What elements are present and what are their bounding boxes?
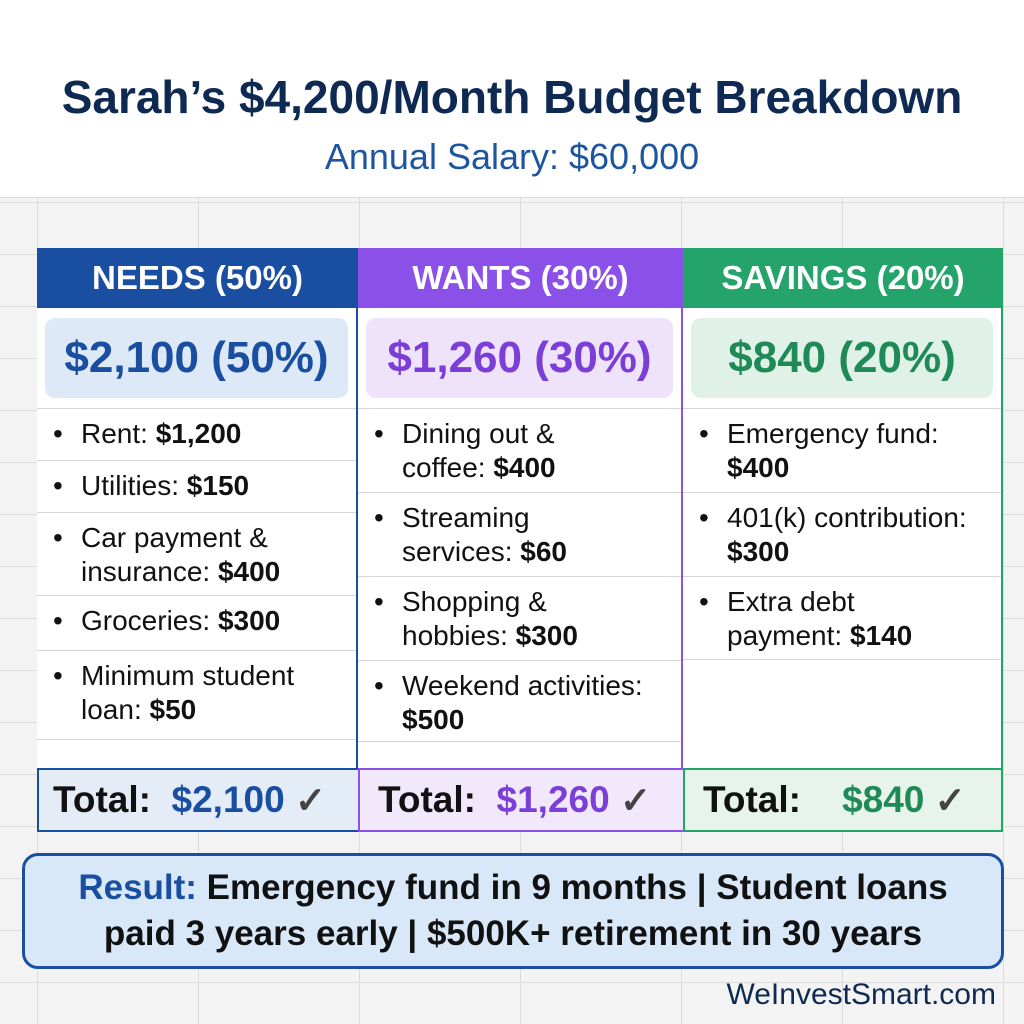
panel: savings [683,308,1003,768]
total: needs: ✓ [295,780,326,820]
header: wants: WANTS (30%) [412,259,629,296]
panel: needs: Minimum student loan: $50 [81,660,294,725]
result callout: Result: Emergency fund in 9 months | Student loans [78,868,948,907]
total: wants: $1,260 [497,779,610,820]
total: wants [358,768,683,832]
panel: needs: Rent: $1,200 [81,418,241,449]
panel: savings: 401(k) contribution: $300 [727,502,967,567]
panel: savings: Extra debt payment: $140 [727,586,912,651]
header: wants [358,248,683,308]
panel: wants: Streaming services: $60 [402,502,567,567]
panel: wants: Shopping & hobbies: $300 [402,586,578,651]
total: savings [683,768,1003,832]
header: needs [37,248,358,308]
amount: needs: $2,100 (50%) [64,333,329,382]
subtitle: Annual Salary: $60,000 [325,136,699,177]
result callout: paid 3 years early | $500K+ retirement in 30 years [104,914,922,953]
total: wants: ✓ [620,780,651,820]
amount: savings: $840 (20%) [728,333,956,382]
header: savings: SAVINGS (20%) [721,259,965,296]
panel: needs: Utilities: $150 [81,470,249,501]
panel: wants: Weekend activities: $500 [402,670,643,735]
amount: wants [366,318,673,398]
panel: wants [358,308,683,768]
panel: wants: Dining out & coffee: $400 [402,418,556,483]
total: needs: $2,100 [172,779,285,820]
amount: needs [45,318,348,398]
panel: needs: Car payment & insurance: $400 [81,522,280,587]
panel: needs [37,308,358,768]
amount: savings [691,318,993,398]
total: savings: ✓ [935,780,966,820]
title: Sarah’s $4,200/Month Budget Breakdown [62,71,962,123]
panel: savings: Emergency fund: $400 [727,418,939,483]
total: wants: Total: [378,779,476,820]
total: savings: $840 [842,779,924,820]
result callout [22,853,1004,969]
amount: wants: $1,260 (30%) [387,333,652,382]
total: needs: Total: [53,779,151,820]
header: needs: NEEDS (50%) [92,259,303,296]
total: needs [37,768,358,832]
panel: needs: Groceries: $300 [81,605,280,636]
total: savings: Total: [703,779,801,820]
title band [0,0,1024,198]
footer brand: WeInvestSmart.com [726,978,996,1011]
header: savings [683,248,1003,308]
